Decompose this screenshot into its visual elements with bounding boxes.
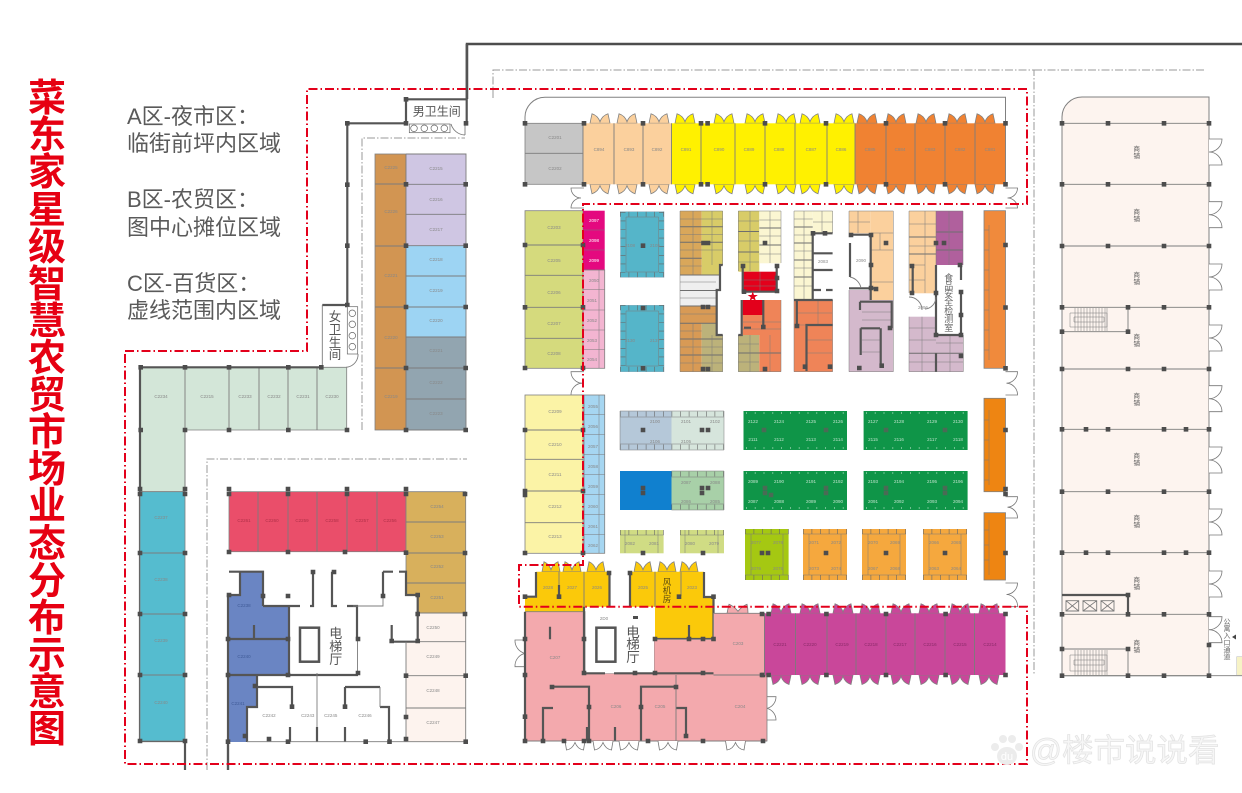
panel: tan shops: C2253 — [430, 534, 444, 539]
panel: left side doors — [571, 188, 1018, 607]
panel: yellow shops column: 2060 — [588, 504, 599, 509]
panel: olive and pink stalls: 2097 — [589, 218, 600, 223]
panel: top row shops (zone A): C891 — [681, 147, 692, 152]
panel: west column shops: C2222 — [429, 380, 443, 385]
labels: 商 — [1133, 270, 1140, 279]
panel: olive and pink stalls: C2207 — [547, 321, 561, 326]
panel: lower stall row: 2065 — [951, 540, 962, 545]
panel: green stalls: 2126 — [833, 419, 844, 424]
labels: 铺 — [1133, 458, 1140, 467]
labels: 商 — [1133, 332, 1140, 341]
panel: west column shops: C2226 — [384, 209, 398, 214]
label: testing room: 食品安全检测室 — [944, 272, 953, 333]
panel: top row shops (zone A): C2202 — [548, 166, 562, 171]
panel: yellow shops column: C2213 — [548, 534, 562, 539]
panel: green stalls: 2128 — [894, 419, 905, 424]
panel: green stalls: 2116 — [894, 437, 904, 442]
labels: 铺 — [1133, 151, 1140, 160]
panel: south-west lift hall and walls: C2243 — [301, 713, 315, 718]
panel: green stalls: 2093 — [927, 499, 938, 504]
panel: top row shops (zone A): C2201 — [548, 135, 562, 140]
apartment entrance label: 公寓入口通道 — [1224, 618, 1230, 661]
panel: red shops: C2257 — [355, 518, 369, 523]
panel: gold shops: 2025 — [638, 585, 649, 590]
panel: lower stall row: 2076 — [751, 566, 762, 571]
panel: pale shops: C2249 — [426, 654, 440, 659]
panel: yellow shops column: C2210 — [548, 442, 562, 447]
zone C dashed boundaries — [207, 70, 1205, 770]
title: 菜东家星级智慧农贸市场业态分布示意图 — [28, 78, 66, 751]
apartment entrance label — [1224, 618, 1242, 675]
panel: pink shops and lift hall — [515, 573, 776, 750]
icon: paw logo: du — [1001, 751, 1013, 763]
panel: lower stall row: 2064 — [951, 566, 962, 571]
panel: top row shops (zone A) — [525, 97, 1006, 194]
panel: top row shops (zone A): C892 — [652, 147, 663, 152]
panel: green stalls: 2130 — [953, 419, 964, 424]
panel: tan shops: C2252 — [430, 564, 444, 569]
panel: green stalls: 2127 — [868, 419, 879, 424]
panel: teal shops column: C2238 — [154, 577, 168, 582]
panel: magenta shops — [762, 604, 1006, 684]
panel: teal stalls: 2130 — [625, 338, 636, 343]
panel: stall block 7 with testing room — [909, 211, 963, 372]
panel: pink shops and lift hall: C205 — [655, 704, 666, 709]
panel: blue shops — [228, 572, 289, 742]
label: fan room: 风机房 — [663, 577, 672, 604]
panel: green stalls: 2089 — [748, 479, 759, 484]
panel: west column shops: C2219 — [429, 288, 443, 293]
panel: pink shops and lift hall: C203 — [733, 641, 744, 646]
panel: red shops: C2256 — [383, 518, 397, 523]
panel: green stalls: 2192 — [833, 479, 844, 484]
panel: stall row 1 pale blue and green: 2106 — [650, 439, 661, 444]
panel: west column shops: C2216 — [429, 197, 443, 202]
panel: yellow shops column: C2209 — [548, 409, 562, 414]
panel: stall block 4 with red stalls — [738, 211, 781, 372]
panel: women's toilet: 女卫生间 — [329, 309, 341, 362]
panel: olive and pink stalls: 2051 — [587, 298, 598, 303]
panel: yellow shops column: 2059 — [588, 484, 599, 489]
panel: red shops — [229, 492, 406, 552]
panel: top row shops (zone A): C887 — [806, 147, 817, 152]
panel: west column shops: C2225 — [384, 165, 398, 170]
panel: green stalls: 2190 — [774, 479, 785, 484]
panel: lower stall row: 2071 — [809, 540, 820, 545]
panel: top row shops (zone A): C888 — [774, 147, 785, 152]
panel: lower stall row: 2072 — [831, 540, 842, 545]
panel: west column shops: C2218 — [429, 257, 443, 262]
panel: yellow shops column: 2061 — [588, 524, 599, 529]
panel: green stalls: 2117 — [927, 437, 937, 442]
panel: lower stall row: 2069 — [890, 540, 901, 545]
labels: 铺 — [1133, 645, 1140, 654]
lifts — [1066, 601, 1114, 611]
panel: top row shops (zone A): C886 — [836, 147, 847, 152]
panel: green stalls: 2191 — [806, 479, 817, 484]
panel: green stalls: 2195 — [927, 479, 938, 484]
labels: 商 — [1133, 513, 1140, 522]
panel: south-west lift hall and walls — [228, 489, 466, 770]
panel: gold shops: 2023 — [687, 585, 698, 590]
watermark: @楼市说说看 — [1030, 732, 1219, 768]
panel: stall row 1 pale blue and green — [620, 411, 724, 510]
legend: zone descriptions: B区-农贸区： — [127, 187, 259, 212]
panel: olive and pink stalls: 2050 — [589, 278, 600, 283]
panel: lower stall row: 2073 — [809, 566, 820, 571]
panel: gold shops — [525, 562, 714, 639]
panel: stall row 1 pale blue and green: 2085 — [710, 499, 721, 504]
panel: stall block 5: 2083 — [818, 259, 829, 264]
labels: 铺 — [1133, 277, 1140, 286]
panel: teal stalls — [620, 212, 664, 372]
stairs — [1070, 308, 1107, 675]
panel: pink shops and lift hall: C206 — [611, 704, 622, 709]
panel: lower stall row: 2074 — [831, 566, 842, 571]
panel: top row shops (zone A): C889 — [744, 147, 755, 152]
doors — [1209, 139, 1222, 643]
panel: gold shops: 2026 — [592, 585, 603, 590]
labels: 铺 — [1133, 398, 1140, 407]
panel: lower stall row: 2077 — [751, 540, 762, 545]
panel: red shops: C2260 — [265, 518, 279, 523]
panel: west column shops: C2217 — [429, 227, 443, 232]
panel: green stalls: 2125 — [806, 419, 817, 424]
panel: yellow shops column: C2211 — [549, 472, 562, 477]
labels: 商 — [1133, 207, 1140, 216]
panel: north-west L shops: C2231 — [296, 394, 310, 399]
panel: green stalls: 2122 — [748, 419, 759, 424]
panel: south-west lift hall and walls: 电梯厅 — [329, 626, 342, 667]
outer building wall — [467, 44, 1242, 99]
panel: green stalls: 2090 — [833, 499, 844, 504]
panel: west column shops: C2221 — [384, 273, 398, 278]
panel: stall row 1 pale blue and green: 2105 — [681, 439, 692, 444]
panel: green stalls: 2194 — [894, 479, 905, 484]
panel: olive and pink stalls: C2206 — [547, 290, 561, 295]
panel: green stalls: 2112 — [774, 437, 784, 442]
panel: yellow shops column: 2057 — [588, 444, 599, 449]
panel: top row shops (zone A): C885 — [865, 147, 876, 152]
panel: lower stall row: 2067 — [868, 566, 879, 571]
panel: lower stall row: 2070 — [868, 540, 879, 545]
legend: zone descriptions: C区-百货区： — [127, 271, 260, 296]
panel: magenta shops: C2215 — [953, 642, 967, 647]
panel: green stalls: 2114 — [833, 437, 843, 442]
panel: west column shops: C2220 — [429, 318, 443, 323]
panel: blue shops: C2240 — [237, 654, 251, 659]
panel: men's toilet: 男卫生间 — [413, 104, 461, 118]
panel: lower stall row: 2080 — [685, 541, 696, 546]
legend: zone descriptions: 临街前坪内区域 — [127, 131, 281, 156]
icon: red star: ★ — [747, 291, 758, 303]
labels: 商 — [1133, 144, 1140, 153]
panel: olive and pink stalls: C2208 — [547, 351, 561, 356]
panel: olive and pink stalls: 2054 — [587, 357, 598, 362]
columns — [1062, 123, 1209, 676]
panel: green stalls: 2124 — [774, 419, 785, 424]
labels: 铺 — [1133, 214, 1140, 223]
panel: north-west L shops — [140, 367, 347, 770]
panel: magenta shops: C2218 — [864, 642, 878, 647]
panel: teal shops column: C2240 — [154, 700, 168, 705]
panel: south-west lift hall and walls: C2245 — [324, 713, 338, 718]
panel: men's toilet — [322, 44, 467, 367]
panel: magenta shops: C2217 — [893, 642, 907, 647]
panel: lower stall row — [620, 529, 967, 580]
panel: red shops: C2258 — [325, 518, 339, 523]
panel: green stalls: 2094 — [953, 499, 964, 504]
labels: 铺 — [1133, 520, 1140, 529]
panel: olive and pink stalls: 2052 — [587, 318, 598, 323]
panel: yellow shops column — [525, 245, 643, 553]
labels — [1133, 144, 1140, 654]
panel: stall block 6: 2090 — [856, 258, 867, 263]
labels: 商 — [1133, 451, 1140, 460]
panel: magenta shops: C2221 — [773, 642, 787, 647]
panel: stall block 5 — [794, 211, 833, 372]
panel: lower stall row: 2063 — [929, 566, 940, 571]
panel: west column shops: C2219 — [384, 394, 398, 399]
labels: 商 — [1133, 575, 1140, 584]
panel: right side shops — [1062, 97, 1242, 676]
panel: pink shops and lift hall: C204 — [735, 704, 746, 709]
panel: lower stall row: 2075 — [773, 566, 784, 571]
panel: top row shops (zone A): C881 — [985, 147, 996, 152]
panel: teal stalls: 2105 — [650, 243, 661, 248]
panel: top row shops (zone A): C882 — [955, 147, 966, 152]
lift hall — [585, 608, 654, 673]
legend: zone descriptions: 虚线范围内区域 — [127, 298, 281, 323]
panel: top row shops (zone A): C894 — [594, 147, 605, 152]
panel: pale shops — [406, 613, 466, 742]
panel: yellow shops column: C2212 — [548, 504, 562, 509]
labels: 商 — [1133, 638, 1140, 647]
panel: green stalls: 2115 — [868, 437, 878, 442]
panel: north-west L shops: C2230 — [325, 394, 339, 399]
panel: pale shops: C2250 — [426, 625, 440, 630]
panel: stall row 1 pale blue and green: 2102 — [710, 419, 721, 424]
labels: 商 — [1133, 391, 1140, 400]
panel: green stalls: 2118 — [953, 437, 963, 442]
panel: olive and pink stalls: C2205 — [547, 258, 561, 263]
panel: olive and pink stalls: 2099 — [589, 258, 600, 263]
panel: west column shops: C2223 — [429, 411, 443, 416]
panel: green stalls: 2091 — [868, 499, 879, 504]
panel: magenta shops: C2220 — [803, 642, 817, 647]
panel: stall row 1 pale blue and green: 2086 — [681, 499, 692, 504]
panel: right orange stalls upper — [984, 211, 1006, 368]
zone A red dash-dot boundary — [125, 89, 1027, 764]
panel: magenta shops: C2216 — [923, 642, 937, 647]
panel: green stalls: 2092 — [894, 499, 905, 504]
panel: teal shops column: C2239 — [154, 638, 168, 643]
panel: stall row 1 pale blue and green: 2087 — [681, 480, 692, 485]
panel: green stalls: 2088 — [774, 499, 785, 504]
icon: paw logo — [991, 735, 1023, 765]
panel: lower stall row: 2078 — [773, 540, 784, 545]
panel: south-west lift hall and walls: C2246 — [358, 713, 372, 718]
panel: lower stall row: 2081 — [649, 541, 660, 546]
panel: top row shops (zone A): C893 — [624, 147, 635, 152]
panel: blue shops: C2241 — [231, 701, 245, 706]
panel: lower stall row: 2068 — [890, 566, 901, 571]
panel: teal stalls: 2108 — [625, 243, 636, 248]
panel: stall block 7 with testing room: 2096 — [918, 305, 929, 310]
panel: teal shops column — [140, 489, 185, 741]
panel: top row shops (zone A): C890 — [714, 147, 725, 152]
panel: west column shops: C2221 — [429, 348, 443, 353]
legend: zone descriptions: A区-夜市区： — [127, 104, 259, 129]
panel: north-west L shops: C2234 — [154, 394, 168, 399]
panel: lower stall row: 2066 — [929, 540, 940, 545]
panel: olive and pink stalls — [525, 211, 605, 368]
panel: pink shops and lift hall: C207 — [550, 655, 561, 660]
panel: green stalls: 2193 — [868, 479, 879, 484]
panel: green stalls: 2111 — [748, 437, 758, 442]
panel: top row shops (zone A): C883 — [925, 147, 936, 152]
panel: west column shops — [375, 154, 466, 430]
panel: olive and pink stalls: 2098 — [589, 238, 600, 243]
panel: green stalls: 2089 — [806, 499, 817, 504]
panel: pale shops: C2248 — [426, 688, 440, 693]
panel: west column shops: C2215 — [429, 166, 443, 171]
panel: north-west L shops: C2215 — [200, 394, 214, 399]
panel: stall block 3 — [680, 211, 723, 372]
panel: women's toilet — [329, 307, 358, 367]
panel: teal shops column: C2237 — [154, 515, 168, 520]
panel: west column shops: C2220 — [384, 335, 398, 340]
panel: stall row 1 pale blue and green: 2101 — [681, 419, 692, 424]
panel: magenta shops: C2214 — [983, 642, 997, 647]
panel: teal stalls: 2137 — [650, 338, 661, 343]
panel: green stalls: 2196 — [953, 479, 964, 484]
panel: green stalls — [744, 411, 968, 510]
panel: tan shops: C2254 — [430, 504, 444, 509]
panel: top row shops (zone A): C884 — [895, 147, 906, 152]
panel: green stalls: 2113 — [806, 437, 816, 442]
panel: olive and pink stalls: 2053 — [587, 338, 598, 343]
panel: stall block 6 — [849, 211, 893, 372]
panel: north-west L shops: C2233 — [238, 394, 252, 399]
legend: zone descriptions — [127, 104, 281, 323]
panel: tan shops — [406, 492, 466, 613]
panel: yellow shops column: 2062 — [588, 543, 599, 548]
panel: pale shops: C2247 — [426, 720, 440, 725]
panel: yellow shops column: 2056 — [588, 424, 599, 429]
panel: south-west lift hall and walls: C2242 — [262, 713, 276, 718]
panel: olive and pink stalls: C2203 — [547, 225, 561, 230]
panel: green stalls: 2129 — [927, 419, 938, 424]
panel: magenta shops: C2219 — [835, 642, 849, 647]
panel: gold shops: 2027 — [567, 585, 578, 590]
lift hall: 2D0 — [600, 616, 609, 621]
panel: stall row 1 pale blue and green: 2100 — [650, 419, 661, 424]
panel: red shops: C2259 — [295, 518, 309, 523]
labels: 铺 — [1133, 582, 1140, 591]
lift hall: 电梯厅 — [626, 625, 640, 665]
panel: lower stall row: 2079 — [709, 541, 720, 546]
panel: stall row 1 pale blue and green: 2088 — [710, 480, 721, 485]
panel: lower stall row: 2082 — [625, 541, 636, 546]
legend: zone descriptions: 图中心摊位区域 — [127, 215, 281, 240]
panel: yellow shops column: 2058 — [588, 464, 599, 469]
panel: right orange stalls lower — [984, 398, 1006, 580]
panel: yellow shops column: 2055 — [588, 404, 599, 409]
panel: north-west L shops: C2232 — [267, 394, 281, 399]
labels: 铺 — [1133, 339, 1140, 348]
panel: green stalls: 2087 — [748, 499, 759, 504]
panel: blue shops: C2238 — [237, 603, 251, 608]
panel: gold shops: 2028 — [543, 585, 554, 590]
panel: tan shops: C2251 — [430, 595, 444, 600]
panel: red shops: C2261 — [237, 518, 251, 523]
